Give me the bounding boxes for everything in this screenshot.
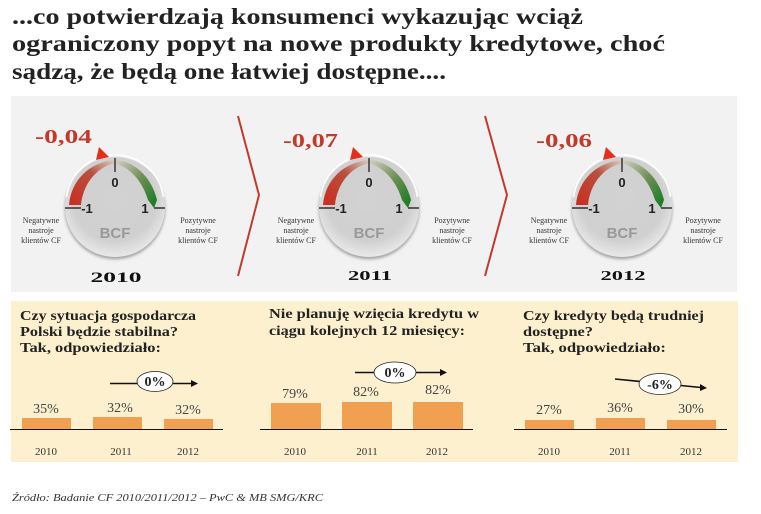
- gauge 2012: [529, 130, 723, 284]
- chart: harder credit: 27%: [536, 403, 562, 418]
- chart: harder credit: 2011: [609, 446, 631, 458]
- arrow: chevron 1: [238, 116, 259, 276]
- chart: harder credit: 2010: [538, 446, 560, 458]
- chart: no loan planned: 82%: [425, 383, 451, 398]
- chart: harder credit: 30%: [678, 402, 704, 417]
- chart: harder credit: 2012: [680, 446, 702, 458]
- chart: economic stability: 2010: [35, 446, 58, 458]
- gauge 2010: -1: [81, 201, 93, 216]
- gauge 2012: -0,06: [536, 130, 592, 152]
- gauge 2010: [21, 126, 218, 286]
- gauge 2011: klientów CF: [276, 236, 316, 245]
- title: ...co potwierdzają konsumenci wykazując wciąż: [12, 4, 583, 29]
- gauge 2010: nastroje: [28, 226, 54, 235]
- chart: harder credit: 36%: [607, 401, 633, 416]
- gauge 2011: BCF: [354, 225, 384, 242]
- chart: harder credit: Tak, odpowiedziało:: [523, 341, 666, 356]
- title: sądzą, że będą one łatwiej dostępne....: [12, 59, 446, 84]
- chart: harder credit: [514, 309, 727, 458]
- chart: economic stability: Czy sytuacja gospodarcza: [20, 309, 196, 324]
- title: [12, 4, 665, 84]
- gauge 2012: klientów CF: [529, 236, 569, 245]
- chart: no loan planned: 2011: [356, 446, 378, 458]
- chart: no loan planned: Nie planuję wzięcia kredytu w: [269, 307, 480, 322]
- chart: economic stability: 0%: [144, 375, 166, 390]
- chart: harder credit: dostępne?: [523, 325, 593, 340]
- chart: no loan planned: 0%: [384, 366, 406, 381]
- chart: no loan planned: [260, 307, 480, 458]
- source note: Źródło: Badanie CF 2010/2011/2012 – PwC & MB SMG/KRC: [12, 492, 323, 504]
- gauge 2012: 1: [648, 201, 656, 216]
- chart: no loan planned: 2010: [284, 446, 306, 458]
- gauge 2010: Negatywne: [23, 216, 60, 225]
- chart: no loan planned: 82%: [353, 385, 379, 400]
- gauge 2011: 2011: [348, 269, 392, 284]
- gauge 2010: klientów CF: [21, 236, 61, 245]
- gauge 2010: klientów CF: [178, 236, 218, 245]
- gauge 2010: -0,04: [35, 126, 92, 148]
- chart: economic stability: Polski będzie stabilna?: [20, 325, 178, 340]
- gauge 2012: nastroje: [536, 226, 562, 235]
- gauge 2012: BCF: [607, 225, 637, 242]
- gauge 2012: 2012: [600, 269, 646, 284]
- chart: no loan planned: 2012: [426, 446, 448, 458]
- gauge 2011: [276, 130, 472, 284]
- gauge 2011: Negatywne: [278, 216, 315, 225]
- chart: economic stability: 35%: [33, 402, 59, 417]
- chart: economic stability: 2011: [110, 446, 132, 458]
- panel: gauges: [11, 96, 737, 292]
- panel: survey results: [10, 301, 738, 462]
- gauge 2012: nastroje: [690, 226, 716, 235]
- gauge 2011: klientów CF: [432, 236, 472, 245]
- gauge 2012: klientów CF: [683, 236, 723, 245]
- chart: harder credit: -6%: [647, 378, 673, 393]
- gauge 2012: -1: [588, 201, 600, 216]
- gauge 2010: 2010: [90, 270, 142, 286]
- gauge 2010: BCF: [100, 225, 130, 242]
- gauge 2011: nastroje: [283, 226, 309, 235]
- gauge 2012: 0: [618, 175, 626, 190]
- gauge 2011: -0,07: [283, 130, 338, 152]
- chart: economic stability: [10, 309, 223, 458]
- chart: no loan planned: 79%: [282, 387, 308, 402]
- gauge 2010: 0: [111, 175, 119, 190]
- arrow: chevron 2: [485, 116, 507, 276]
- gauge 2010: Pozytywne: [180, 216, 216, 225]
- gauge 2010: 1: [141, 201, 149, 216]
- chart: economic stability: 32%: [175, 403, 201, 418]
- chart: harder credit: Czy kredyty będą trudniej: [523, 309, 704, 324]
- gauge 2011: -1: [335, 201, 347, 216]
- gauge 2011: 1: [395, 201, 403, 216]
- gauge 2010: nastroje: [185, 226, 211, 235]
- chart: economic stability: Tak, odpowiedziało:: [20, 341, 161, 356]
- gauge 2011: 0: [365, 175, 373, 190]
- gauge 2012: Negatywne: [531, 216, 568, 225]
- gauge 2012: Pozytywne: [685, 216, 721, 225]
- chart: economic stability: 2012: [177, 446, 199, 458]
- title: ograniczony popyt na nowe produkty kredytowe, choć: [12, 31, 665, 56]
- gauge 2011: Pozytywne: [434, 216, 470, 225]
- gauge 2011: nastroje: [439, 226, 465, 235]
- chart: economic stability: 32%: [107, 401, 133, 416]
- chart: no loan planned: ciągu kolejnych 12 miesięcy:: [269, 324, 465, 339]
